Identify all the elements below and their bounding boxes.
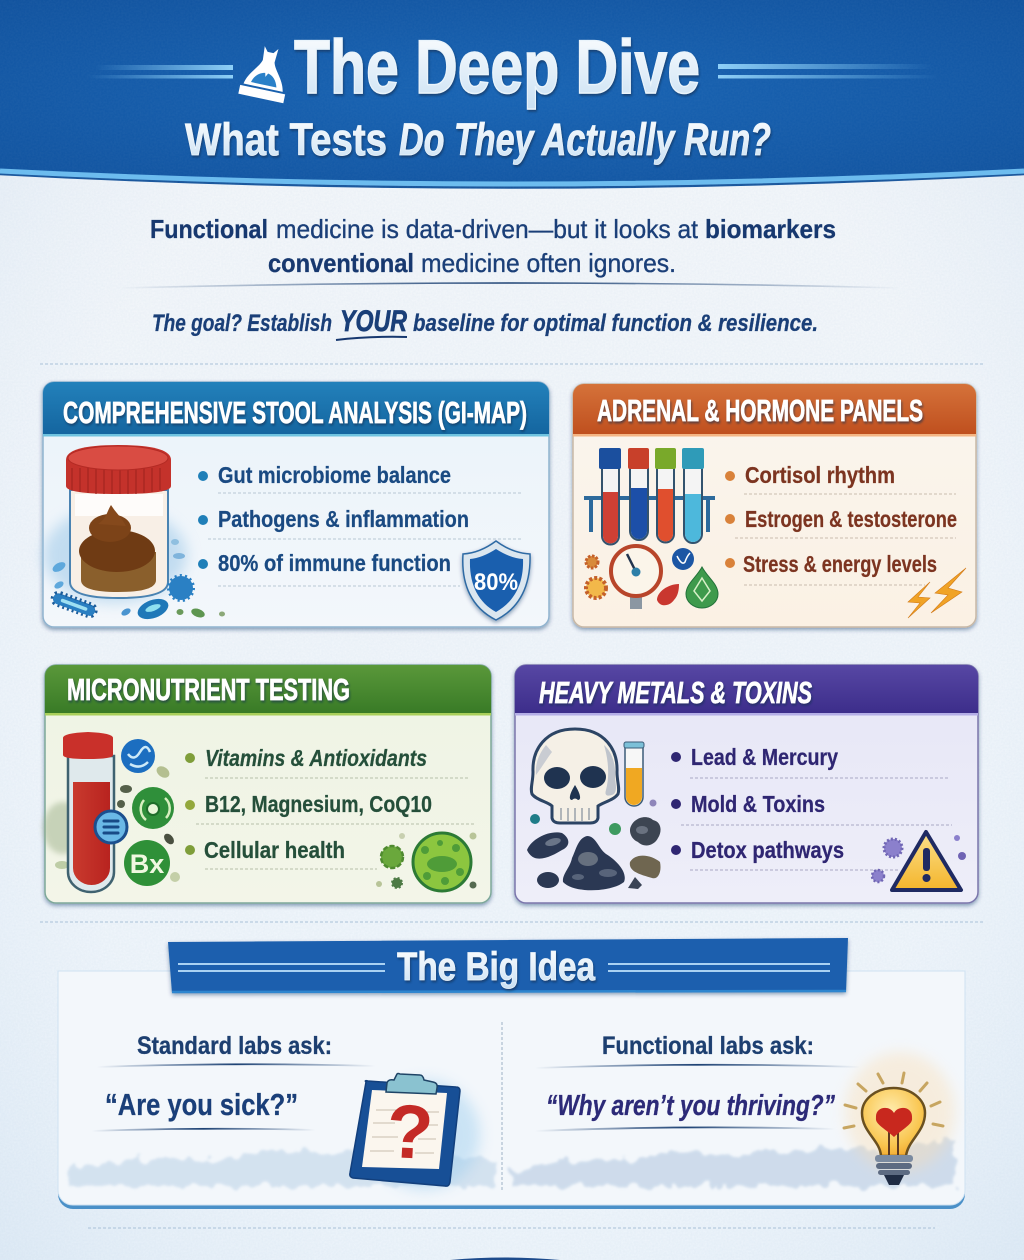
- card header: [515, 665, 978, 716]
- title: The Deep Dive: [294, 25, 700, 110]
- left column: “Are you sick?”: [105, 1087, 298, 1122]
- bullet list: Stress & energy levels: [743, 551, 937, 577]
- icon: lightbulb with heart: [844, 1073, 943, 1185]
- bullet list: Mold & Toxins: [691, 791, 825, 817]
- intro text: medicine is data-driven—but it looks at: [276, 214, 699, 244]
- right mist: [512, 1140, 955, 1186]
- icon: 80% shield: 80%: [474, 569, 518, 596]
- bullet list: [198, 462, 522, 586]
- icon: lightning bolts: [908, 568, 966, 618]
- bullet list: [671, 744, 952, 870]
- icon: specimen jar: [43, 445, 187, 603]
- panel: micronutrient testing: [43, 665, 491, 903]
- left mist: [68, 1150, 495, 1186]
- icon: nutrient capsules: [95, 739, 180, 886]
- bullet list: Estrogen & testosterone: [745, 506, 957, 532]
- icon: skull: [531, 729, 619, 823]
- left column: [92, 1032, 375, 1131]
- subtitle: What Tests: [185, 114, 387, 165]
- bullet list: B12, Magnesium, CoQ10: [205, 791, 432, 817]
- card header: [45, 665, 491, 716]
- icon: microbes: [51, 539, 225, 623]
- icon: 80% shield: [463, 541, 530, 620]
- intro text: biomarkers: [705, 214, 836, 244]
- goal statement: YOUR: [340, 305, 407, 338]
- left column: Standard labs ask:: [137, 1032, 332, 1060]
- icon: flask: [238, 43, 294, 103]
- icon: test tube rack: [584, 448, 715, 544]
- icon: metal rocks: [527, 800, 661, 890]
- card header: HEAVY METALS & TOXINS: [539, 675, 812, 710]
- intro text: Functional: [150, 214, 268, 244]
- panel: heavy metals and toxins: [515, 665, 978, 903]
- bullet list: [725, 462, 957, 585]
- footer arc: [450, 1258, 560, 1260]
- bullet list: Lead & Mercury: [691, 744, 838, 770]
- bullet list: Pathogens & inflammation: [218, 506, 469, 532]
- clipboard glow: [370, 1080, 480, 1190]
- bulb glow: [845, 1052, 955, 1172]
- bullet list: [185, 745, 475, 869]
- panel: the big idea: [58, 971, 965, 1209]
- right column: [535, 1032, 860, 1131]
- bullet list: 80% of immune function: [218, 550, 451, 576]
- intro text: medicine often ignores.: [421, 248, 676, 278]
- title decorative rules: [88, 64, 938, 78]
- icon: nutrient capsules: Bx: [130, 849, 164, 879]
- header banner: [0, 0, 1024, 188]
- panel: adrenal and hormone: [573, 384, 976, 627]
- banner: the big idea: The Big Idea: [397, 945, 596, 989]
- bullet list: Detox pathways: [691, 837, 844, 863]
- right column: Functional labs ask:: [602, 1032, 814, 1060]
- goal statement: The goal? Establish: [152, 310, 332, 337]
- icon: yellow vial: [624, 742, 644, 806]
- card header: MICRONUTRIENT TESTING: [67, 672, 350, 707]
- bullet list: Cellular health: [204, 837, 345, 863]
- panel: stool analysis: [43, 382, 549, 627]
- subtitle: [185, 114, 771, 165]
- goal statement: [152, 305, 818, 340]
- intro text: [150, 214, 836, 278]
- goal statement: baseline for optimal function & resilience.: [413, 310, 818, 337]
- subtitle: Do They Actually Run?: [399, 114, 771, 165]
- card header: [43, 382, 549, 436]
- icon: gears, hormones: [586, 548, 718, 608]
- icon: clipboard: ?: [384, 1089, 435, 1176]
- bullet list: Gut microbiome balance: [218, 462, 451, 488]
- bullet list: Vitamins & Antioxidants: [205, 745, 427, 771]
- intro text: conventional: [268, 248, 414, 278]
- bullet list: Cortisol rhythm: [745, 462, 895, 488]
- icon: clipboard: [350, 1074, 460, 1186]
- icon: gauge: [611, 546, 661, 609]
- right column: “Why aren’t you thriving?”: [546, 1090, 835, 1122]
- card header: [573, 384, 976, 436]
- icon: warning triangle: [872, 832, 966, 890]
- icon: blood tube: [43, 732, 114, 892]
- banner: the big idea: [168, 938, 848, 993]
- icon: cells: [376, 832, 476, 891]
- card header: COMPREHENSIVE STOOL ANALYSIS (GI-MAP): [63, 395, 527, 430]
